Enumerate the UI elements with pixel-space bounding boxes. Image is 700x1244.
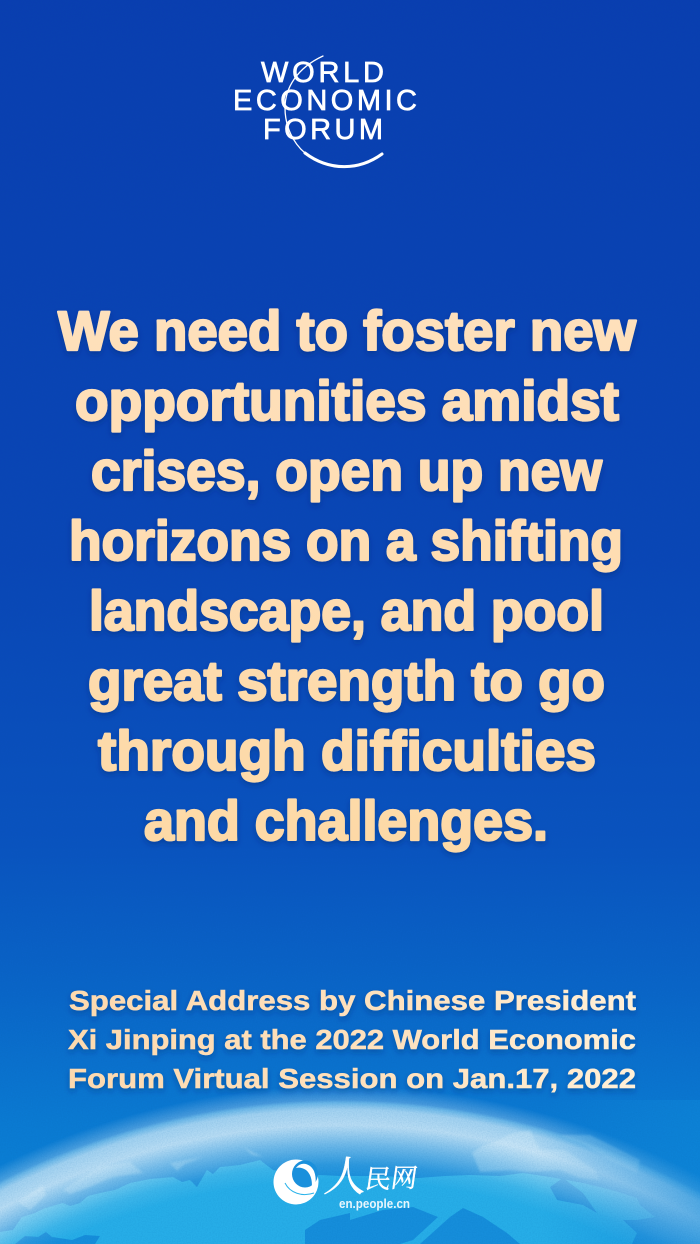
- source caption: Special Address by Chinese President: [69, 985, 636, 1016]
- source caption: Xi Jinping at the 2022 World Economic: [68, 1024, 636, 1055]
- main quote: landscape, and pool: [89, 579, 604, 642]
- logo Chinese name: 民: [363, 1159, 394, 1196]
- main quote: great strength to go: [88, 649, 605, 712]
- main quote: and challenges.: [144, 789, 548, 852]
- logo arc: [285, 56, 382, 167]
- globe: [0, 1080, 700, 1244]
- main quote: opportunities amidst: [75, 369, 619, 432]
- logo Chinese name: [321, 1143, 420, 1204]
- main quote: through difficulties: [98, 719, 596, 782]
- logo Chinese name: 网: [389, 1158, 420, 1195]
- logo wordmark: FORUM: [263, 114, 383, 146]
- source caption: Forum Virtual Session on Jan.17, 2022: [68, 1063, 636, 1094]
- logo web address: en.people.cn: [339, 1196, 410, 1211]
- main quote: horizons on a shifting: [69, 509, 623, 572]
- globe: continents: [0, 1160, 655, 1244]
- logo emblem: [274, 1160, 318, 1204]
- logo wordmark: [233, 57, 417, 146]
- main quote: We need to foster new: [58, 299, 636, 362]
- logo Chinese name: 人: [321, 1143, 372, 1204]
- globe: pale arctic islands: [18, 1130, 640, 1210]
- logo wordmark: ECONOMIC: [233, 85, 417, 117]
- logo wordmark: WORLD: [261, 57, 384, 89]
- People's Daily Online logo: [274, 1143, 420, 1211]
- main quote: crises, open up new: [91, 439, 602, 502]
- source caption: [68, 985, 636, 1094]
- World Economic Forum logo: [233, 56, 417, 167]
- main quote: [58, 299, 636, 852]
